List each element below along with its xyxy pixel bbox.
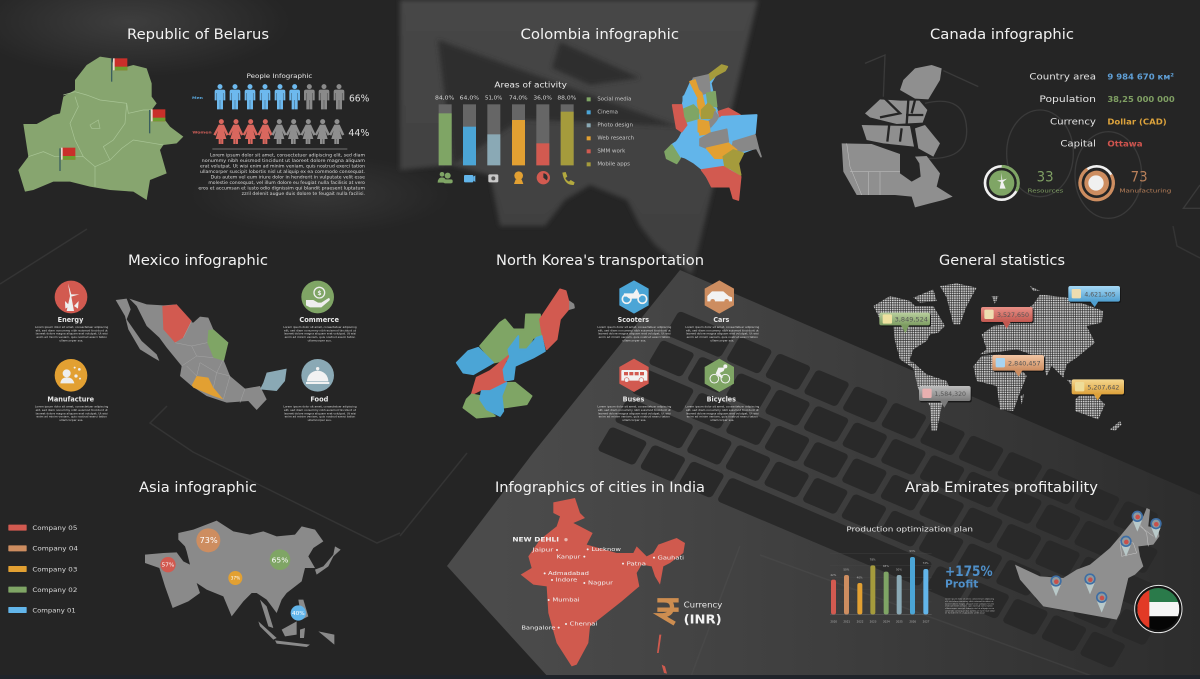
facts: country data: Capital <box>1060 140 1096 150</box>
heading: Areas of activity: Areas of activity <box>494 79 567 89</box>
text: Cars description: ullamcorper sus. <box>710 338 734 342</box>
legend: activity categories: Mobile apps <box>597 162 631 168</box>
icon circle: Energy <box>55 281 87 313</box>
hexagon icon: Scooters <box>619 280 649 314</box>
text: Commerce description: enim ad minim veniam, quis nostrud exerci tation <box>285 335 355 339</box>
text: currency INR <box>684 600 723 626</box>
text: Manufacture description: enim ad minim veniam, quis nostrud exerci tation <box>36 415 107 419</box>
panel: Canada <box>842 27 1200 218</box>
bar chart: areas of activity: 88,0% <box>557 96 576 102</box>
bar chart: production by year: 2025 <box>896 619 903 623</box>
text: Commerce description: Lorem ipsum dolor sit amet, consectetuer adipiscing <box>283 325 357 329</box>
bubble: 65% <box>270 549 290 570</box>
legend: activity categories: Photo design <box>597 123 633 129</box>
text block: lorem paragraph: erat volutpat. Ut wisi enim ad minim veniam, quis nostrud exerci tation <box>200 163 365 168</box>
bar chart: production by year: 72% <box>923 561 929 565</box>
text: Food description: laoreet dolore magna aliquam erat volutpat. Ut wisi <box>284 411 356 415</box>
bubble: 40%: 40% <box>292 611 305 617</box>
text: Buses description <box>597 405 671 422</box>
facts: country data <box>1029 72 1097 150</box>
text: Manufacture description: elit, sed diam nonummy nibh euismod tincidunt ut <box>36 408 108 412</box>
bubble: 65%: 65% <box>272 556 289 564</box>
legend: companies: Company 04 <box>32 546 78 553</box>
text: Cars description: elit, sed diam nonummy nibh euismod tincidunt ut <box>686 328 759 332</box>
bar chart: production by year: 93% <box>909 549 916 553</box>
text: Commerce description: ullamcorper sus. <box>308 338 332 342</box>
city labels: NEW DEHLI <box>512 536 559 543</box>
label: Bicycles: Bicycles <box>707 396 736 404</box>
map: India <box>521 498 685 674</box>
text: Bicycles description: elit, sed diam nonummy nibh euismod tincidunt ut <box>686 408 759 412</box>
city labels: Jaipur <box>531 548 554 554</box>
map: North Korea provinces <box>457 289 574 418</box>
text block: lorem paragraph: eros et accumsan et iusto odio dignissim qui blandit praesent luptatum <box>198 186 365 191</box>
text: Energy description: Lorem ipsum dolor sit amet, consectetuer adipiscing <box>35 325 108 329</box>
legend: companies <box>8 525 78 614</box>
map: Colombia regions <box>665 65 761 200</box>
city labels: Gauhati <box>658 555 684 561</box>
icon circle: Food <box>301 359 334 392</box>
text block: profit note: commodo consequat duis autem vel eum iriure dolor <box>945 609 995 612</box>
legend: companies: Company 05 <box>32 525 77 532</box>
text: Scooters description <box>597 325 671 342</box>
text block: profit note: laoreet dolore magna aliquam erat volutpat. Ut wisi <box>945 602 994 605</box>
bar chart: production by year: 2023 <box>870 619 877 623</box>
facts: values: 38,25 000 000 <box>1107 94 1175 104</box>
panel: India <box>495 480 723 674</box>
callout: 1,584,320: 1,584,320 <box>934 391 966 398</box>
hexagon icon: Cars <box>705 280 734 314</box>
text: Food description: enim ad minim veniam, quis nostrud exerci tation <box>285 415 355 419</box>
text block: profit note: elit, sed diam nonummy nibh euismod tincidunt ut <box>945 600 994 603</box>
pictogram row: women 44%: 44% <box>348 128 369 139</box>
city labels: Mumbai <box>552 598 580 604</box>
panel: Mexico <box>35 253 357 422</box>
legend: companies: Company 01 <box>32 607 76 614</box>
bar chart: production by year: 78% <box>870 557 876 561</box>
callout: 3,849,524: 3,849,524 <box>895 317 928 324</box>
text: currency INR: Currency <box>684 600 723 609</box>
callout: 3,849,524 <box>879 313 931 333</box>
callout: 3,527,650 <box>981 307 1034 329</box>
text: Manufacture description <box>35 405 108 422</box>
bar chart: production by year: 2027 <box>923 619 930 623</box>
text block: profit note: in hendrerit in vulputate velit esse <box>945 612 986 615</box>
facts: values: Ottawa <box>1107 139 1143 149</box>
text: Commerce description <box>283 325 357 342</box>
legend: companies: Company 02 <box>32 587 77 594</box>
text: Commerce description: elit, sed diam nonummy nibh euismod tincidunt ut <box>284 328 357 332</box>
title: General statistics: General statistics <box>939 253 1065 269</box>
heading: People Infographic: People Infographic <box>247 73 313 80</box>
callout: 3,527,650: 3,527,650 <box>997 312 1029 319</box>
icon: rupee <box>657 600 679 624</box>
text: Buses description: enim ad minim veniam, quis nostrud exerci tation <box>599 415 670 419</box>
text: Food description: Lorem ipsum dolor sit amet, consectetuer adipiscing <box>283 405 357 409</box>
bubble: 57%: 57% <box>162 563 175 569</box>
map: Asia <box>145 521 341 647</box>
bubble: 57% <box>160 557 176 572</box>
city labels: Indore <box>555 578 578 584</box>
text: Scooters description: enim ad minim veniam, quis nostrud exerci tation <box>599 335 670 339</box>
panel: Republic of Belarus <box>18 27 369 200</box>
callout: 5,207,642: 5,207,642 <box>1087 384 1119 391</box>
label: Cars: Cars <box>713 316 729 324</box>
text: Buses description: elit, sed diam nonummy nibh euismod tincidunt ut <box>598 408 671 412</box>
facts: values: 9 984 670 км² <box>1107 71 1174 81</box>
text: Cars description <box>685 325 759 342</box>
bar chart: production by year: 2026 <box>909 619 916 623</box>
title: India: Infographics of cities in India <box>495 480 705 496</box>
text: Buses description: Lorem ipsum dolor sit amet, consectetuer adipiscing <box>597 405 671 409</box>
title: Canada: Canada infographic <box>930 27 1074 43</box>
text block: lorem paragraph <box>198 153 365 196</box>
map: Belarus regions with flags <box>18 57 183 200</box>
facts: country data: Country area <box>1029 72 1096 82</box>
text: Cars description: Lorem ipsum dolor sit amet, consectetuer adipiscing <box>685 325 759 329</box>
city labels: Bangalore <box>521 625 556 631</box>
panel: Arab Emirates <box>830 480 1182 633</box>
icon circle: Commerce <box>301 281 334 313</box>
city labels: Kanpur <box>557 554 581 560</box>
label: Commerce: Commerce <box>299 316 339 324</box>
text: Bicycles description: Lorem ipsum dolor sit amet, consectetuer adipiscing <box>685 405 759 409</box>
hexagon icon: Bicycles <box>705 359 734 392</box>
title: Colombia: Colombia infographic <box>520 27 679 43</box>
text block: lorem paragraph: ullamcorper suscipit lobortis nisl ut aliquip ex ea commodo consequat. <box>200 169 365 174</box>
facts: values: Dollar (CAD) <box>1107 116 1167 126</box>
text block: lorem paragraph: molestie consequat, vel illum dolore eu feugiat nulla facilisis at vero <box>208 180 365 185</box>
bar chart: production by year: 50% <box>843 567 850 571</box>
legend: activity categories: Cinema <box>597 110 618 116</box>
panel: Colombia <box>435 27 761 200</box>
text: Energy description: enim ad minim veniam, quis nostrud exerci tation <box>36 335 107 339</box>
bar chart: areas of activity: 36,0% <box>533 96 552 102</box>
bubble: 37% <box>228 571 242 585</box>
icon circle: Manufacture <box>55 359 87 392</box>
bar chart: production by year: 2021 <box>843 619 850 623</box>
bar chart: production by year: 65% <box>883 564 889 568</box>
label: Manufacture: Manufacture <box>47 396 94 404</box>
text: Commerce description: laoreet dolore magna aliquam erat volutpat. Ut wisi <box>284 332 356 336</box>
bar chart: areas of activity: 51,0% <box>485 96 502 102</box>
text block: profit note: enim ad minim veniam, quis nostrud exerci tation <box>945 605 993 608</box>
panel: Asia <box>8 480 341 647</box>
text: currency INR: (INR) <box>684 611 722 626</box>
pictogram row: men 66%: 66% <box>349 93 369 104</box>
icon circle: Commerce: $ <box>317 290 322 297</box>
panel: General statistics <box>873 253 1125 431</box>
bar chart: production by year <box>830 549 932 623</box>
pictogram row: men 66% <box>192 84 369 109</box>
text: Energy description: laoreet dolore magna aliquam erat volutpat. Ut wisi <box>36 332 108 336</box>
text block: profit note: ullamcorper suscipit lobortis nisl ut aliquip ex ea <box>945 607 995 610</box>
callout: 4,621,305: 4,621,305 <box>1084 291 1116 298</box>
bubble: 73% <box>196 528 220 552</box>
bar chart: areas of activity: 64,0% <box>460 96 479 102</box>
text: Scooters description: elit, sed diam nonummy nibh euismod tincidunt ut <box>598 328 671 332</box>
stat: +175% profit: Profit <box>945 577 978 590</box>
map: dotted world <box>873 283 1122 431</box>
legend: companies: Company 03 <box>32 566 77 573</box>
map: UAE with pins <box>1015 508 1162 620</box>
legend: activity categories <box>587 97 634 168</box>
pictogram row: men 66%: Men <box>192 96 203 100</box>
donut: manufacturing 73: 73 <box>1131 169 1148 185</box>
legend: activity categories: Web research <box>597 136 634 142</box>
text: Scooters description: laoreet dolore magna aliquam erat volutpat. Ut wisi <box>598 332 671 336</box>
donut: manufacturing 73 <box>1074 160 1172 206</box>
city labels: Nagpur <box>588 581 614 587</box>
title: Mexico: Mexico infographic <box>128 253 268 269</box>
text block: profit note: Lorem ipsum dolor sit amet, consectetuer adipiscing <box>945 598 995 601</box>
city labels: Admadabad <box>548 571 589 577</box>
title: Belarus: Republic of Belarus <box>127 27 269 43</box>
pictogram row: women 44%: Women <box>192 131 212 135</box>
text: Scooters description: ullamcorper sus. <box>622 338 646 342</box>
bubble: 37%: 37% <box>231 576 241 582</box>
stat: +175% profit <box>945 564 993 590</box>
panel: North Korea <box>457 253 759 422</box>
hexagon icon: Buses <box>619 359 649 392</box>
donut: resources 33 <box>985 166 1063 200</box>
city labels: Lucknow <box>591 547 621 553</box>
bubble: 40% <box>291 605 306 621</box>
donut: manufacturing 73: Manufacturing <box>1119 188 1172 194</box>
facts: country data: Currency <box>1050 117 1097 127</box>
donut: resources 33: Resources <box>1028 188 1063 194</box>
bubble: 73%: 73% <box>200 536 218 545</box>
icons: activity row <box>438 171 575 185</box>
text: Cars description: laoreet dolore magna aliquam erat volutpat. Ut wisi <box>686 332 759 336</box>
bar chart: production by year: 2022 <box>857 619 864 623</box>
stat: +175% profit: +175% <box>945 564 993 580</box>
text: Manufacture description: Lorem ipsum dolor sit amet, consectetuer adipiscing <box>35 405 108 409</box>
label: Food: Food <box>310 396 328 404</box>
text: Energy description <box>35 325 108 342</box>
text: Bicycles description <box>685 405 759 422</box>
bar chart: production by year: 42% <box>830 573 837 577</box>
text: Food description: elit, sed diam nonummy nibh euismod tincidunt ut <box>284 408 357 412</box>
text: Manufacture description: ullamcorper sus. <box>59 418 83 422</box>
text block: profit note <box>945 598 995 615</box>
city labels <box>512 536 684 631</box>
legend: activity categories: Social media <box>597 97 631 103</box>
map: Mexico states <box>116 299 287 410</box>
city labels: Chennai <box>570 622 598 628</box>
facts: country data: Population <box>1039 95 1096 105</box>
text: Scooters description: Lorem ipsum dolor sit amet, consectetuer adipiscing <box>597 325 671 329</box>
callout: 2,840,457: 2,840,457 <box>1008 360 1041 367</box>
title: North Korea: North Korea's transportation <box>496 253 704 269</box>
text block: lorem paragraph: Lorem ipsum dolor sit amet, consectetuer adipiscing elit, sed diam <box>210 153 365 158</box>
bar chart: production by year: 50% <box>896 567 902 571</box>
text block: lorem paragraph: Duis autem vel eum iriure dolor in hendrerit in vulputate velit esse <box>211 174 365 179</box>
text: Energy description: ullamcorper sus. <box>59 338 83 342</box>
facts: values <box>1107 71 1175 149</box>
text: Food description: ullamcorper sus. <box>308 418 332 422</box>
callout: 5,207,642 <box>1072 379 1125 400</box>
text: Bicycles description: laoreet dolore magna aliquam erat volutpat. Ut wisi <box>686 411 759 415</box>
title: Asia: Asia infographic <box>139 480 257 496</box>
text: Bicycles description: enim ad minim veniam, quis nostrud exerci tation <box>687 415 758 419</box>
callout: 2,840,457 <box>992 355 1045 377</box>
title: Arab Emirates: Arab Emirates profitability <box>905 480 1098 496</box>
heading: production plan: Production optimization plan <box>846 524 973 533</box>
bar chart: production by year: 2024 <box>883 619 890 623</box>
donut: resources 33: 33 <box>1037 169 1054 185</box>
map: Canada <box>842 65 953 207</box>
pictogram row: women 44% <box>192 119 369 144</box>
text: Manufacture description: laoreet dolore magna aliquam erat volutpat. Ut wisi <box>36 411 108 415</box>
label: Scooters: Scooters <box>618 316 649 324</box>
label: Buses: Buses <box>623 396 644 404</box>
text block: lorem paragraph: nonummy nibh euismod tincidunt ut laoreet dolore magna aliquam <box>202 158 365 163</box>
text: Buses description: laoreet dolore magna aliquam erat volutpat. Ut wisi <box>598 411 671 415</box>
bar chart: production by year: 2020 <box>830 619 837 623</box>
bar chart: areas of activity: 74,0% <box>509 96 528 102</box>
callout: 4,621,305 <box>1068 286 1121 307</box>
callout: 1,584,320 <box>919 386 972 408</box>
text: Bicycles description: ullamcorper sus. <box>710 418 734 422</box>
icon: UAE flag <box>1135 585 1182 633</box>
text: Energy description: elit, sed diam nonummy nibh euismod tincidunt ut <box>36 328 108 332</box>
city labels: Patna <box>627 562 646 568</box>
legend: activity categories: SMM work <box>597 149 626 155</box>
text: Cars description: enim ad minim veniam, quis nostrud exerci tation <box>687 335 758 339</box>
text: Buses description: ullamcorper sus. <box>622 418 646 422</box>
bar chart: areas of activity <box>435 96 576 165</box>
bar chart: areas of activity: 84,0% <box>435 96 454 102</box>
text: Food description <box>283 405 357 422</box>
bar chart: production by year: 40% <box>857 575 863 579</box>
text block: lorem paragraph: zzril delenit augue duis dolore te feugait nulla facilisi. <box>242 191 365 196</box>
label: Energy: Energy <box>58 316 84 324</box>
